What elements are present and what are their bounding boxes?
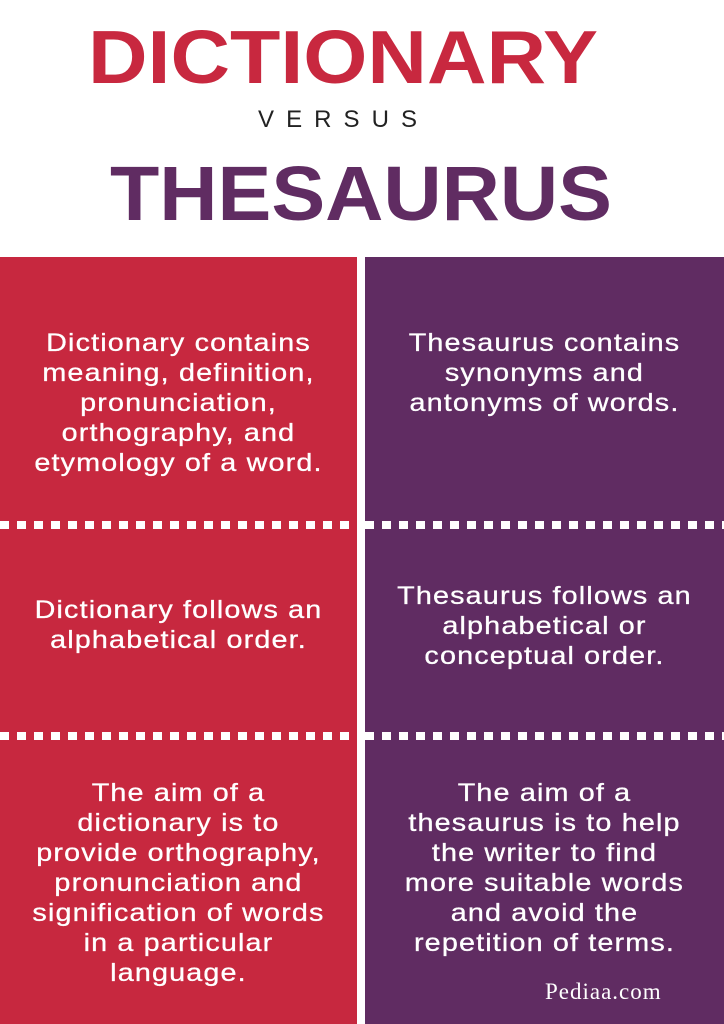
text: thesaurus contents: synonyms and [445,359,644,387]
text: dictionary contents: orthography, and [62,419,295,447]
text: thesaurus aim: the writer to find [432,839,657,867]
text: thesaurus aim: thesaurus is to help [408,809,681,837]
title [88,15,612,237]
text: dictionary contents [34,329,323,477]
text: thesaurus aim: more suitable words [405,869,684,897]
heading: dictionary: DICTIONARY [88,15,598,99]
text: dictionary aim [32,779,325,987]
text: thesaurus contents [409,329,680,417]
text: dictionary order: alphabetical order. [50,626,307,654]
text: dictionary contents: Dictionary contains [46,329,311,357]
text: dictionary aim: The aim of a [92,779,265,807]
text: dictionary order [35,596,322,654]
text: dictionary aim: dictionary is to [77,809,280,837]
heading: versus: VERSUS [258,106,417,133]
text: thesaurus aim: and avoid the [451,899,638,927]
text: dictionary order: Dictionary follows an [35,596,322,624]
text: thesaurus aim: repetition of terms. [414,929,675,957]
text: thesaurus contents: antonyms of words. [410,389,679,417]
text: thesaurus order [397,582,692,670]
credit: Pediaa.com [545,979,662,1004]
text: dictionary aim: pronunciation and [54,869,303,897]
text: thesaurus order: alphabetical or [442,612,647,640]
text: dictionary contents: meaning, definition, [42,359,315,387]
text: dictionary aim: provide orthography, [36,839,321,867]
text: thesaurus aim [405,779,684,957]
panel: dictionary [0,257,357,1024]
text: dictionary aim: language. [110,959,247,987]
panel: thesaurus [365,257,724,1024]
text: dictionary contents: etymology of a word. [34,449,323,477]
text: dictionary aim: signification of words [32,899,325,927]
text: thesaurus order: conceptual order. [424,642,665,670]
text: thesaurus contents: Thesaurus contains [409,329,680,357]
text: thesaurus order: Thesaurus follows an [397,582,692,610]
text: dictionary contents: pronunciation, [80,389,277,417]
text: thesaurus aim: The aim of a [458,779,631,807]
text: dictionary aim: in a particular [84,929,273,957]
heading: thesaurus: THESAURUS [110,151,612,237]
